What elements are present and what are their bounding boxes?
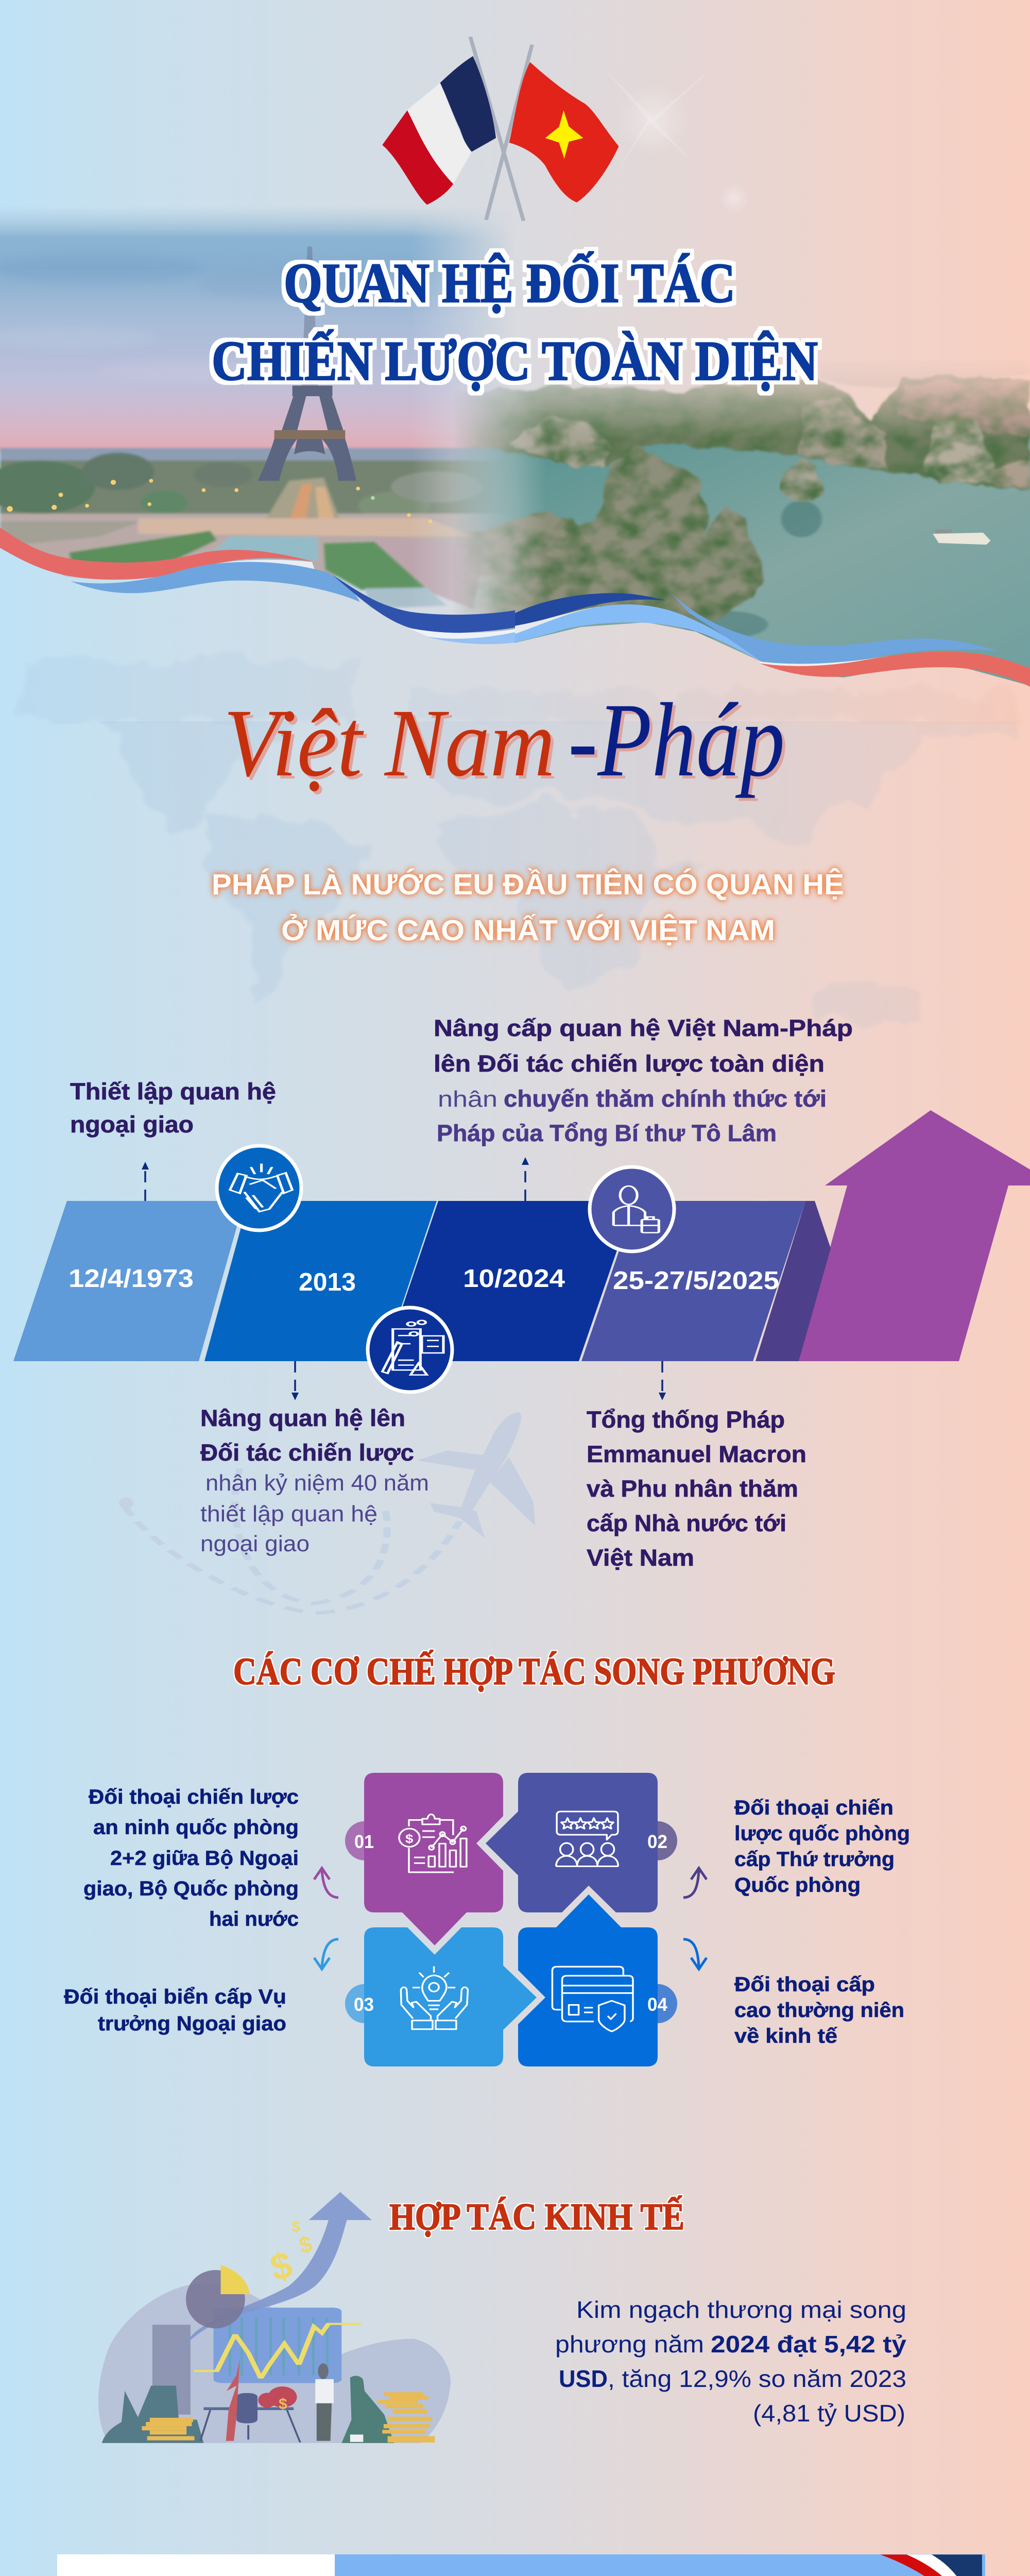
mechanism text 04: cao thường niên [734, 1999, 904, 2022]
date labels: 25-27/5/2025 [613, 1267, 779, 1295]
icon: handshake [217, 1146, 301, 1230]
timeline text: 1973: Thiết lập quan hệ [70, 1078, 276, 1105]
map watermark under the wave [21, 654, 1025, 721]
segment: 10/2024 [384, 1201, 634, 1361]
mountain ridge [436, 376, 1030, 489]
trade turnover text: phương năm [555, 2331, 704, 2358]
heading: economic cooperation: HỢP TÁC KINH TẾ [389, 2195, 684, 2238]
icon: secure card [552, 1967, 633, 2031]
tile 02 [486, 1773, 658, 1912]
mechanism text 01: hai nước [209, 1908, 299, 1930]
mechanism text 01: an ninh quốc phòng [93, 1816, 299, 1839]
cruise boat [933, 529, 991, 545]
panel: France in Vietnam [57, 2554, 985, 2576]
tile numbers: 03 [354, 1994, 374, 2015]
tile numbers: 01 [354, 1831, 374, 1852]
trade turnover text: USD [559, 2365, 608, 2392]
timeline text: 2024: nhân [438, 1087, 497, 1112]
timeline text: 2024: Nâng cấp quan hệ Việt Nam-Pháp [434, 1015, 853, 1041]
heading: bilateral mechanisms: CÁC CƠ CHẾ HỢP TÁC SONG PHƯƠNG [233, 1650, 835, 1693]
mechanism text 02: Đối thoại chiến [734, 1797, 894, 1819]
decorative sparkle near flags [603, 67, 749, 214]
banner photo: Ha Long Bay [458, 372, 1030, 685]
timeline text: 2013: ngoại giao [200, 1531, 310, 1556]
segment: 2013 [204, 1201, 437, 1361]
tile 01 [364, 1773, 503, 1945]
date labels: 2013 [299, 1268, 356, 1296]
timeline text: 2013 [200, 1405, 429, 1556]
timeline text: 2025: và Phu nhân thăm [587, 1476, 798, 1502]
timeline text: 2025: Emmanuel Macron [587, 1441, 806, 1467]
small limestone islet [782, 458, 824, 501]
mechanism text 02 [734, 1797, 910, 1896]
Eiffel tower [258, 247, 356, 481]
world map watermark [26, 670, 1025, 1028]
timeline text: 2013: Nâng quan hệ lên [200, 1405, 405, 1431]
icon: idea in hands [401, 1967, 468, 2029]
banner photo: Eiffel tower and Paris [0, 206, 539, 609]
tile numbers [354, 1831, 667, 2015]
illustration: economic growth: $ [279, 2396, 287, 2413]
French flag ribbon [880, 2554, 982, 2576]
number bubbles [345, 1821, 677, 2023]
cloud streaks [0, 253, 394, 383]
timeline band [13, 1201, 831, 1361]
segment: dark side [756, 1201, 831, 1361]
date labels: 12/4/1973 [68, 1265, 194, 1293]
mechanism text 01: 2+2 giữa Bộ Ngoại [110, 1847, 299, 1870]
title: CHIẾN LƯỢC TOÀN DIỆN [212, 330, 818, 392]
timeline text: 2013: nhân kỷ niệm 40 năm [205, 1470, 429, 1496]
title: QUAN HỆ ĐỐI TÁC [284, 252, 735, 314]
script heading: Việt Nam - Pháp: Việt Nam [224, 689, 555, 796]
segment: 12/4/1973 [13, 1201, 244, 1361]
trade turnover text: 2024 đạt 5,42 tỷ [711, 2331, 906, 2358]
mechanism text 01 [83, 1786, 299, 1930]
plane watermark [119, 1412, 536, 1613]
mechanism text 04: về kinh tế [734, 2025, 838, 2047]
mechanism text 01: giao, Bộ Quốc phòng [83, 1877, 299, 1900]
timeline text: 2025 [587, 1406, 806, 1571]
subheading: France first EU country [212, 868, 844, 947]
mechanism text 03 [64, 1986, 286, 2035]
wave ribbons [0, 528, 1030, 687]
dashed connector arrows [142, 1157, 666, 1400]
trade turnover text: (4,81 tỷ USD) [753, 2400, 905, 2427]
icon: finance report: $ [405, 1831, 414, 1846]
trade turnover text: , tăng 12,9% so năm 2023 [608, 2365, 906, 2392]
mechanism text 03: Đối thoại biển cấp Vụ [64, 1986, 286, 2008]
timeline text: 2024 [434, 1015, 853, 1146]
icon: rated audience [556, 1811, 618, 1866]
mechanism text 03: trưởng Ngoại giao [98, 2012, 286, 2035]
foreground rock [436, 448, 765, 620]
tile 03 [364, 1927, 537, 2066]
timeline text: 1973 [70, 1078, 276, 1138]
trade turnover text [555, 2296, 906, 2427]
page-colour cover under the wave [0, 548, 1030, 721]
icon: business person [590, 1167, 674, 1251]
curved arrows [314, 1868, 707, 1969]
timeline text: 2024: lên Đối tác chiến lược toàn diện [434, 1050, 825, 1077]
timeline text: 2025: Tổng thống Pháp [587, 1406, 785, 1433]
subheading: France first EU country: Ở MỨC CAO NHẤT VỚI VIỆT NAM [281, 913, 775, 947]
icon: crossed France and Vietnam flags [382, 37, 619, 221]
timeline: purple growth arrow [799, 1110, 1030, 1361]
city skyline and trees [0, 448, 539, 609]
timeline text: 2025: Việt Nam [587, 1545, 694, 1571]
street lights [7, 479, 432, 523]
mechanism text 02: Quốc phòng [734, 1874, 861, 1896]
trade turnover text: Kim ngạch thương mại song [576, 2296, 906, 2323]
illustration: economic growth: $ [291, 2218, 300, 2235]
mechanism text 04 [734, 1973, 904, 2047]
tile numbers: 04 [647, 1994, 667, 2015]
timeline text: 2024: chuyến thăm chính thức tới [504, 1086, 827, 1112]
timeline text: 2013: thiết lập quan hệ [200, 1501, 377, 1527]
icons inside tiles [399, 1811, 633, 2031]
script heading: Việt Nam - Pháp [224, 682, 785, 799]
subheading: France first EU country: PHÁP LÀ NƯỚC EU ĐẦU TIÊN CÓ QUAN HỆ [212, 868, 844, 901]
tile numbers: 02 [647, 1831, 667, 1852]
mechanism text 04: Đối thoại cấp [734, 1973, 875, 1996]
mechanism text 02: lược quốc phòng [734, 1822, 910, 1845]
script heading: Việt Nam - Pháp: -Pháp [568, 682, 785, 799]
illustration: economic growth: $ [296, 2231, 315, 2259]
icon: planning document [368, 1308, 452, 1392]
date labels: 10/2024 [463, 1265, 565, 1293]
date labels [68, 1265, 779, 1296]
mechanism text 01: Đối thoại chiến lược [89, 1786, 299, 1808]
title [212, 252, 818, 392]
segment: 25-27/5/2025 [581, 1201, 805, 1361]
timeline text: 2025: cấp Nhà nước tới [587, 1510, 786, 1536]
timeline text: 2013: Đối tác chiến lược [200, 1439, 414, 1466]
timeline text: 1973: ngoại giao [70, 1111, 194, 1138]
icon: finance report [399, 1815, 467, 1872]
tile 04 [518, 1894, 658, 2066]
illustration: economic growth: $ [266, 2244, 296, 2289]
illustration: economic growth [98, 2192, 451, 2443]
timeline text: 2024: Pháp của Tổng Bí thư Tô Lâm [437, 1120, 777, 1146]
mechanism text 02: cấp Thứ trưởng [734, 1848, 895, 1871]
